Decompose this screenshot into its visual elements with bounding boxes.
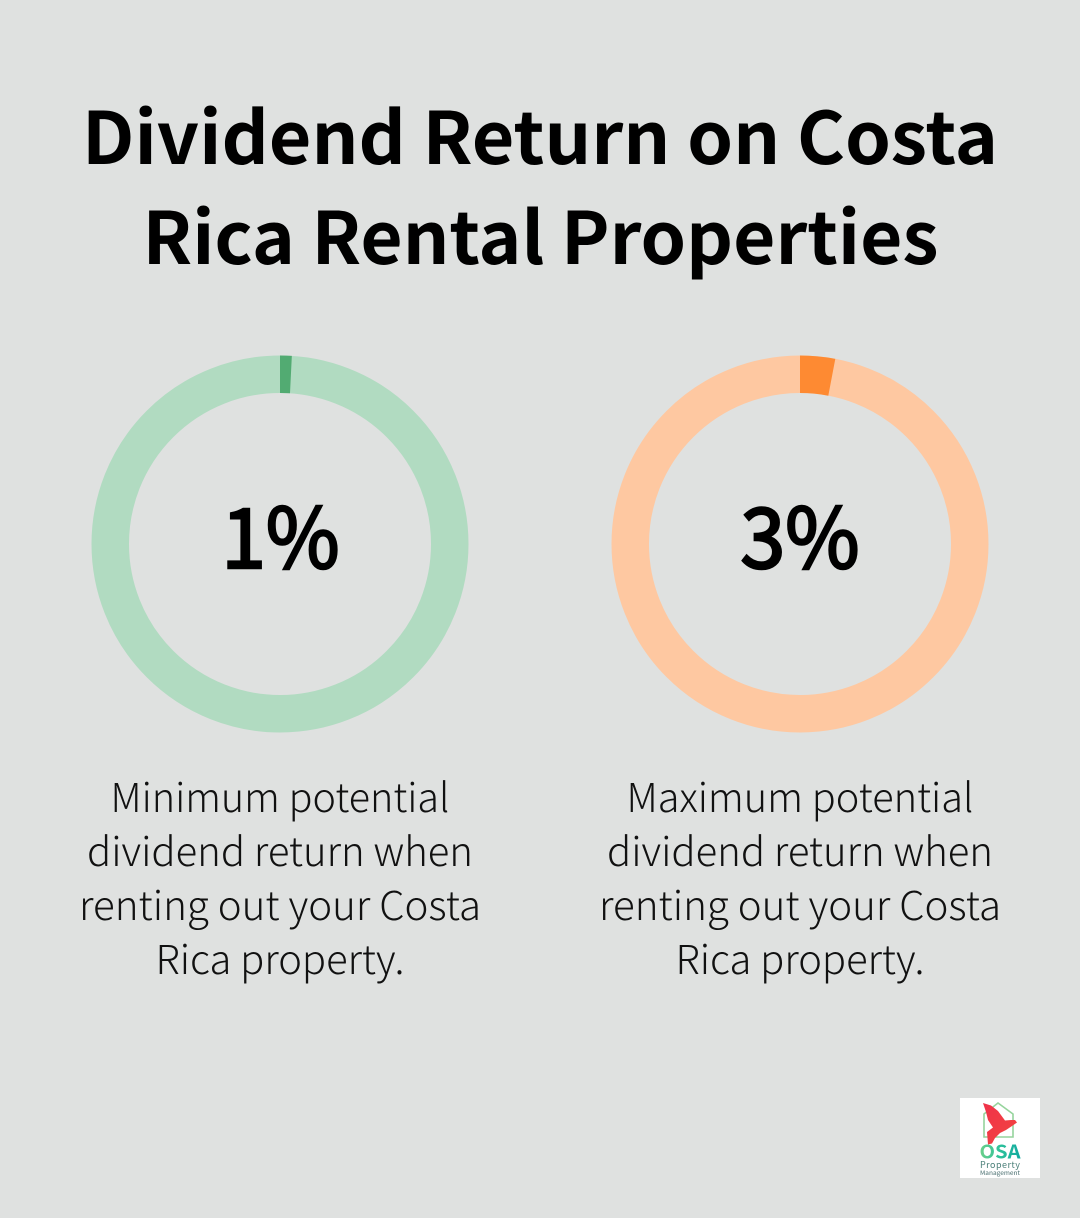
caption: minimum return: renting out your Costa <box>79 874 481 932</box>
caption: maximum return: dividend return when <box>607 820 993 878</box>
caption: minimum return: Rica property. <box>156 928 404 986</box>
donut chart: minimum return 1% <box>110 356 450 714</box>
title <box>82 80 998 285</box>
caption: maximum return: renting out your Costa <box>599 874 1001 932</box>
value: 3%: 3% <box>740 472 860 592</box>
donut chart: maximum return 3% <box>630 356 970 714</box>
caption: minimum return: dividend return when <box>87 820 473 878</box>
caption: maximum return: Rica property. <box>676 928 924 986</box>
icon: red bird <box>983 1103 1017 1144</box>
logo: OSA Property Management: Property <box>980 1158 1020 1171</box>
caption: minimum return: Minimum potential <box>110 766 450 824</box>
icon: house outline <box>984 1103 1013 1137</box>
caption: maximum return: Maximum potential <box>626 766 974 824</box>
caption: minimum return <box>79 766 481 986</box>
title: Dividend Return on Costa <box>82 80 998 185</box>
logo: OSA Property Management <box>960 1098 1040 1178</box>
caption: maximum return <box>599 766 1001 986</box>
title: Rica Rental Properties <box>142 180 938 285</box>
value: 1%: 1% <box>222 472 340 592</box>
logo: OSA Property Management: Management <box>980 1168 1021 1177</box>
logo: OSA Property Management: OSA <box>980 1138 1021 1164</box>
